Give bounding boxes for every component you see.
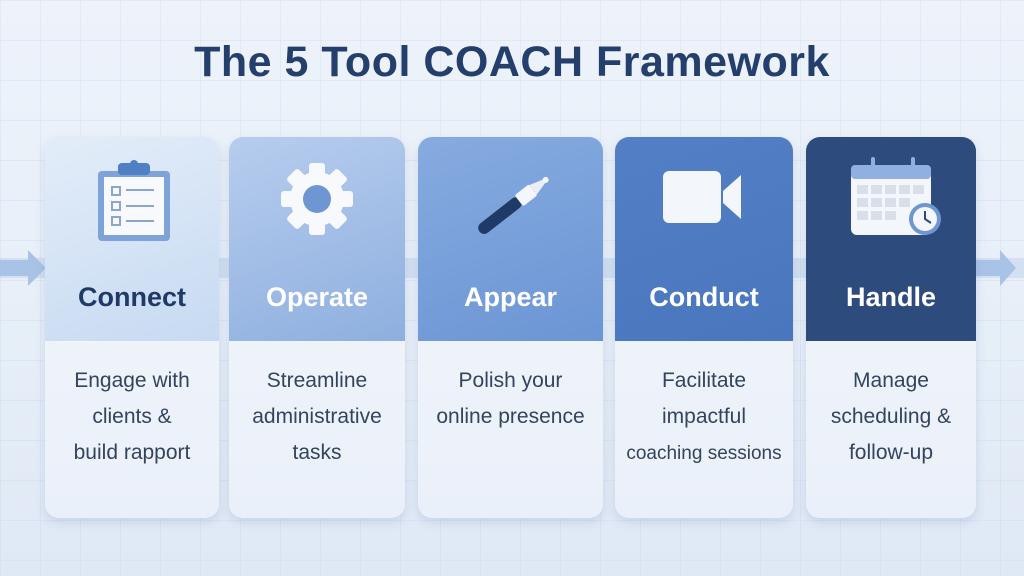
text: Operate description: administrative xyxy=(252,405,382,428)
text: Conduct description: coaching sessions xyxy=(626,443,782,464)
heading: Appear: Appear xyxy=(464,282,557,312)
icon: clipboard xyxy=(98,160,170,241)
text: Appear description xyxy=(436,369,585,428)
text: Handle description: scheduling & xyxy=(831,405,951,428)
text: Connect description xyxy=(74,369,190,464)
text: Connect description: clients & xyxy=(92,405,172,428)
text: Handle description: Manage xyxy=(853,369,929,392)
text: Handle description xyxy=(831,369,951,464)
text: Operate description: tasks xyxy=(292,441,342,464)
icon: calendar with clock xyxy=(851,157,941,235)
text: Appear description: Polish your xyxy=(459,369,562,392)
text: Connect description: Engage with xyxy=(74,369,190,392)
panel: Handle xyxy=(806,137,976,518)
arrow: right exit xyxy=(976,250,1016,286)
panel: Operate xyxy=(229,137,405,518)
text: Operate description xyxy=(252,369,382,464)
text: Connect description: build rapport xyxy=(74,441,190,464)
text: Conduct description xyxy=(626,369,782,464)
icon: gear xyxy=(281,163,353,235)
panel: Connect xyxy=(45,137,219,518)
arrow: flow line xyxy=(0,258,1024,278)
heading: Operate: Operate xyxy=(266,282,368,312)
arrow: left entry xyxy=(0,250,45,286)
heading: Conduct: Conduct xyxy=(649,282,759,312)
text: Conduct description: Facilitate xyxy=(662,369,746,392)
icon: pen xyxy=(478,176,549,234)
panel: Conduct xyxy=(615,137,793,518)
text: Conduct description: impactful xyxy=(662,405,746,428)
title: The 5 Tool COACH Framework xyxy=(194,38,830,86)
text: Appear description: online presence xyxy=(436,405,585,428)
icon: video camera xyxy=(663,171,741,223)
heading: Handle: Handle xyxy=(846,282,936,312)
text: Handle description: follow-up xyxy=(849,441,933,464)
heading: Connect: Connect xyxy=(78,282,186,312)
panel: Appear xyxy=(418,137,603,518)
text: Operate description: Streamline xyxy=(267,369,367,392)
